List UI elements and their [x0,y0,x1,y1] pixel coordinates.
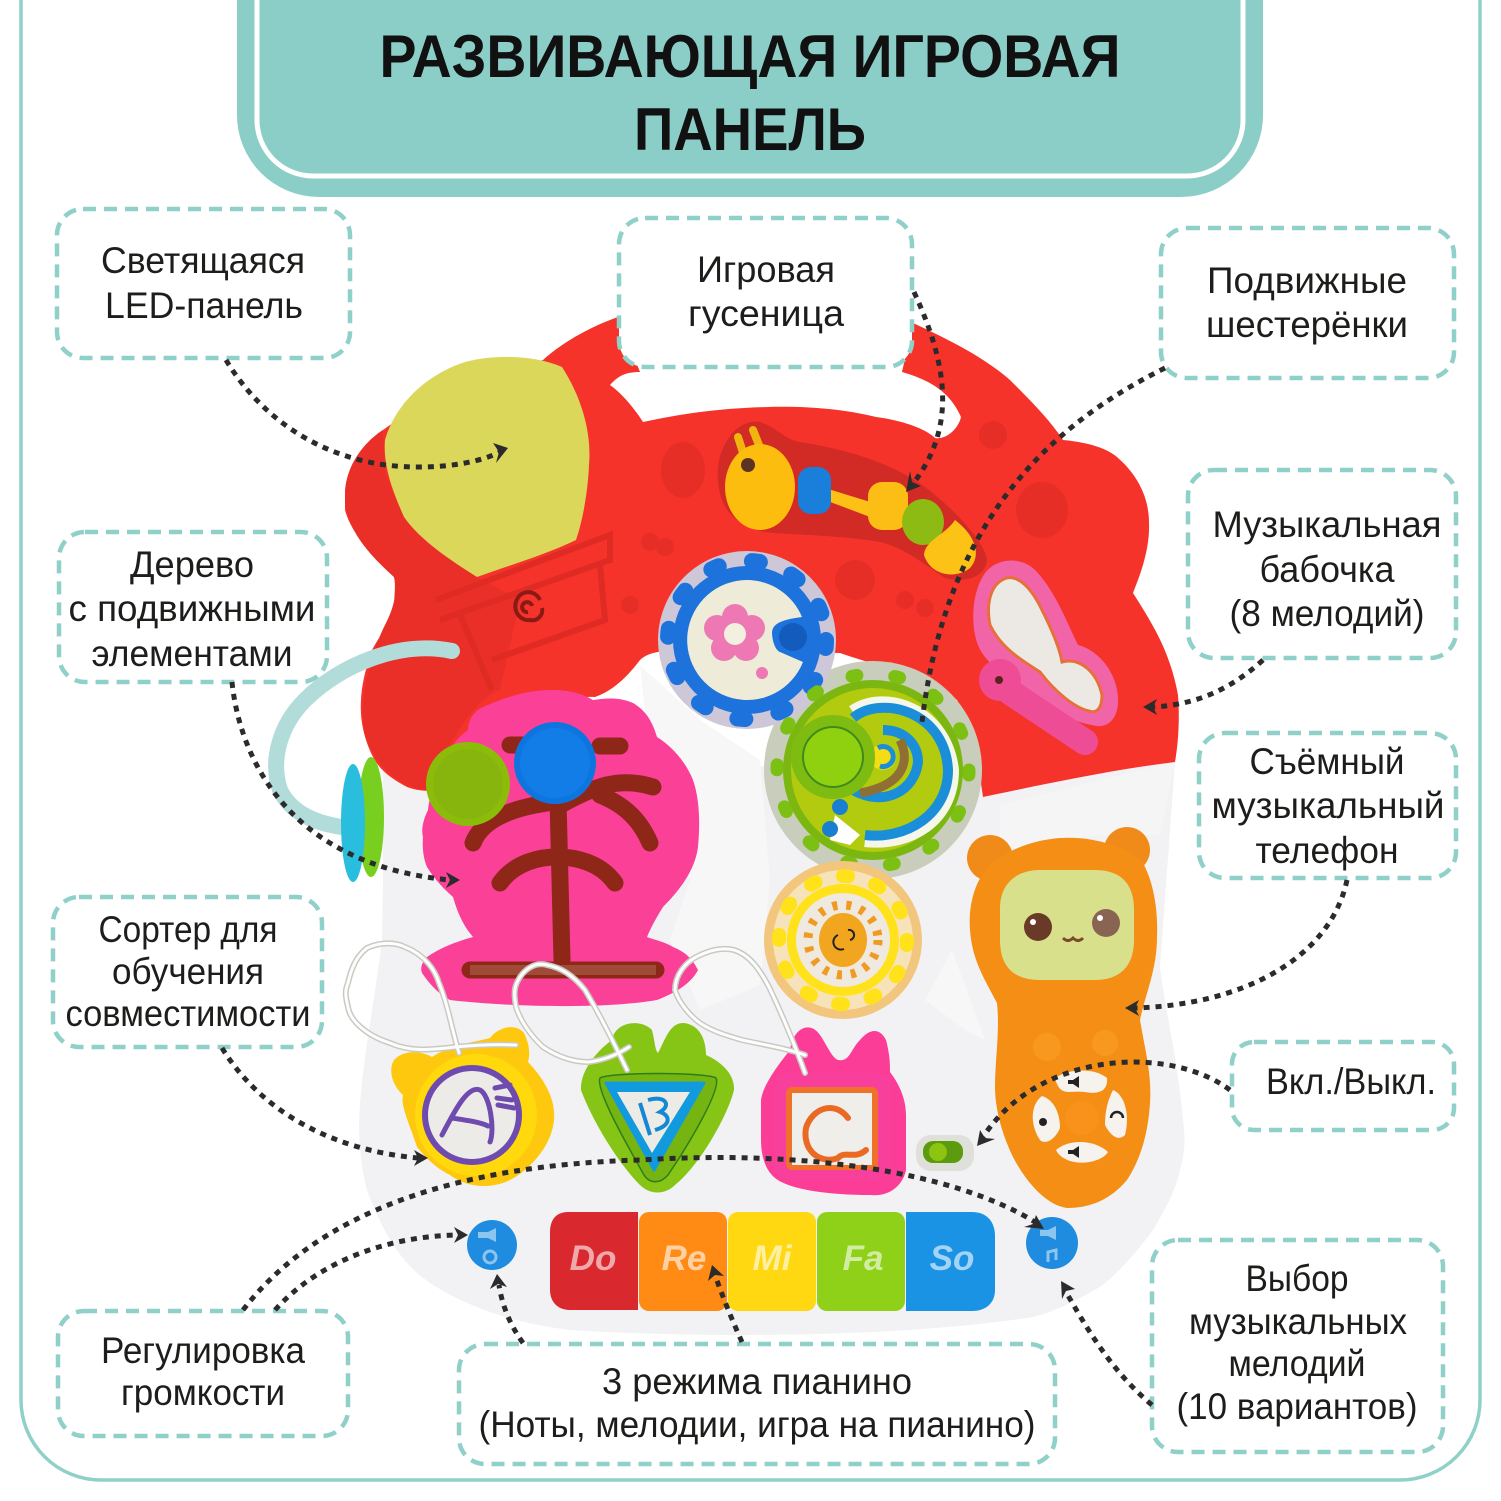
callout: volume: Регулировка [101,1330,305,1371]
piano keys: So [930,1239,974,1278]
callout: gears: Подвижные [1207,260,1407,301]
callout: tree: Дерево [130,544,254,585]
handle opening [610,372,961,438]
volume button [467,1220,517,1270]
shape sorter: A [391,1027,554,1186]
title: РАЗВИВАЮЩАЯ ИГРОВАЯ [380,23,1120,90]
phone face [1000,870,1134,980]
callout: volume [58,1311,348,1436]
piano keys [550,1212,995,1311]
title banner [237,0,1263,197]
arrow: LED panel [226,360,508,467]
teether [341,757,384,882]
roof embossed apples [621,421,1068,617]
body highlights [640,665,770,1010]
piano keys: Do [570,1239,616,1278]
title [380,23,1120,163]
callout: sorter [53,897,322,1047]
callout: tree: с подвижными [68,588,316,629]
callout: melody choice: (10 вариантов) [1176,1386,1418,1427]
callout: sorter: обучения [112,951,264,992]
blue gear [658,551,836,729]
teal ring [276,648,452,828]
callout: on/off [1232,1042,1454,1130]
callout: piano modes: 3 режима пианино [602,1361,912,1402]
orange phone [967,827,1157,1208]
callout: butterfly: бабочка [1260,549,1395,590]
callout: phone [1199,733,1456,878]
callout: sorter: совместимости [66,993,310,1034]
pink tree sorter [421,690,699,1006]
callout: tree [59,532,327,682]
callout: sorter: Сортер для [98,909,278,950]
arrow: volume label to melody button [243,1158,1044,1310]
callout: caterpillar [619,218,912,367]
butterfly [973,561,1118,742]
LED panel [385,357,589,577]
title: ПАНЕЛЬ [634,96,866,163]
callout: LED panel [57,209,350,358]
phone keypad [1033,1070,1127,1163]
callout: LED panel: LED-панель [105,285,303,326]
sun gear [764,861,922,1019]
on/off switch [916,1135,974,1171]
arrow: on/off [977,1062,1230,1146]
green gear [777,674,969,866]
callout: phone: Съёмный [1250,741,1404,782]
callout: butterfly [1188,470,1456,658]
arrow: piano modes [708,1265,742,1342]
arrow: phone [1125,880,1347,1016]
arrow: volume button from modes [490,1274,523,1343]
callout: volume: громкости [121,1372,285,1413]
green gear recess [764,661,982,879]
callout: phone: музыкальный [1212,785,1444,826]
arrow: volume label to volume button [275,1227,468,1310]
callout: melody choice: мелодий [1228,1343,1366,1384]
LED stand [436,535,610,690]
callout: tree: элементами [92,633,292,674]
piano keys: Fa [843,1239,883,1278]
callout: melody choice: музыкальных [1189,1301,1407,1342]
callout: piano modes: (Ноты, мелодии, игра на пианино) [478,1404,1036,1445]
callout: gears: шестерёнки [1206,304,1408,345]
callout: butterfly: (8 мелодий) [1230,593,1424,634]
callout: gears [1161,228,1454,378]
callout: piano modes [459,1344,1055,1464]
arrow: sorter [222,1048,428,1166]
callout: caterpillar: гусеница [688,293,844,334]
toy: activity panel [276,317,1185,1335]
roof shading [345,430,520,790]
arrow: butterfly [1143,660,1263,715]
shape sorter: triangle [581,1023,734,1192]
caterpillar track [718,422,987,580]
arrow: tree [232,682,460,888]
piano keys: Re [662,1239,706,1278]
red roof [345,317,1179,797]
caterpillar [725,430,976,574]
callout: on/off: Вкл./Выкл. [1266,1061,1436,1102]
callout: melody choice: Выбор [1246,1258,1348,1299]
callout: butterfly: Музыкальная [1212,504,1442,545]
callout: phone: телефон [1256,830,1398,871]
arrow: caterpillar [906,292,943,492]
toy body [359,762,1185,1335]
callout: caterpillar: Игровая [697,249,835,290]
shape sorter: C [761,1027,906,1195]
piano keys: Mi [753,1239,793,1278]
cords [346,943,805,1073]
arrow: gears [922,368,1165,722]
callout: melody choice [1152,1240,1443,1452]
melody button [1026,1217,1078,1269]
arrow: melody choice [1061,1281,1152,1405]
callout: LED panel: Светящаяся [101,240,305,281]
